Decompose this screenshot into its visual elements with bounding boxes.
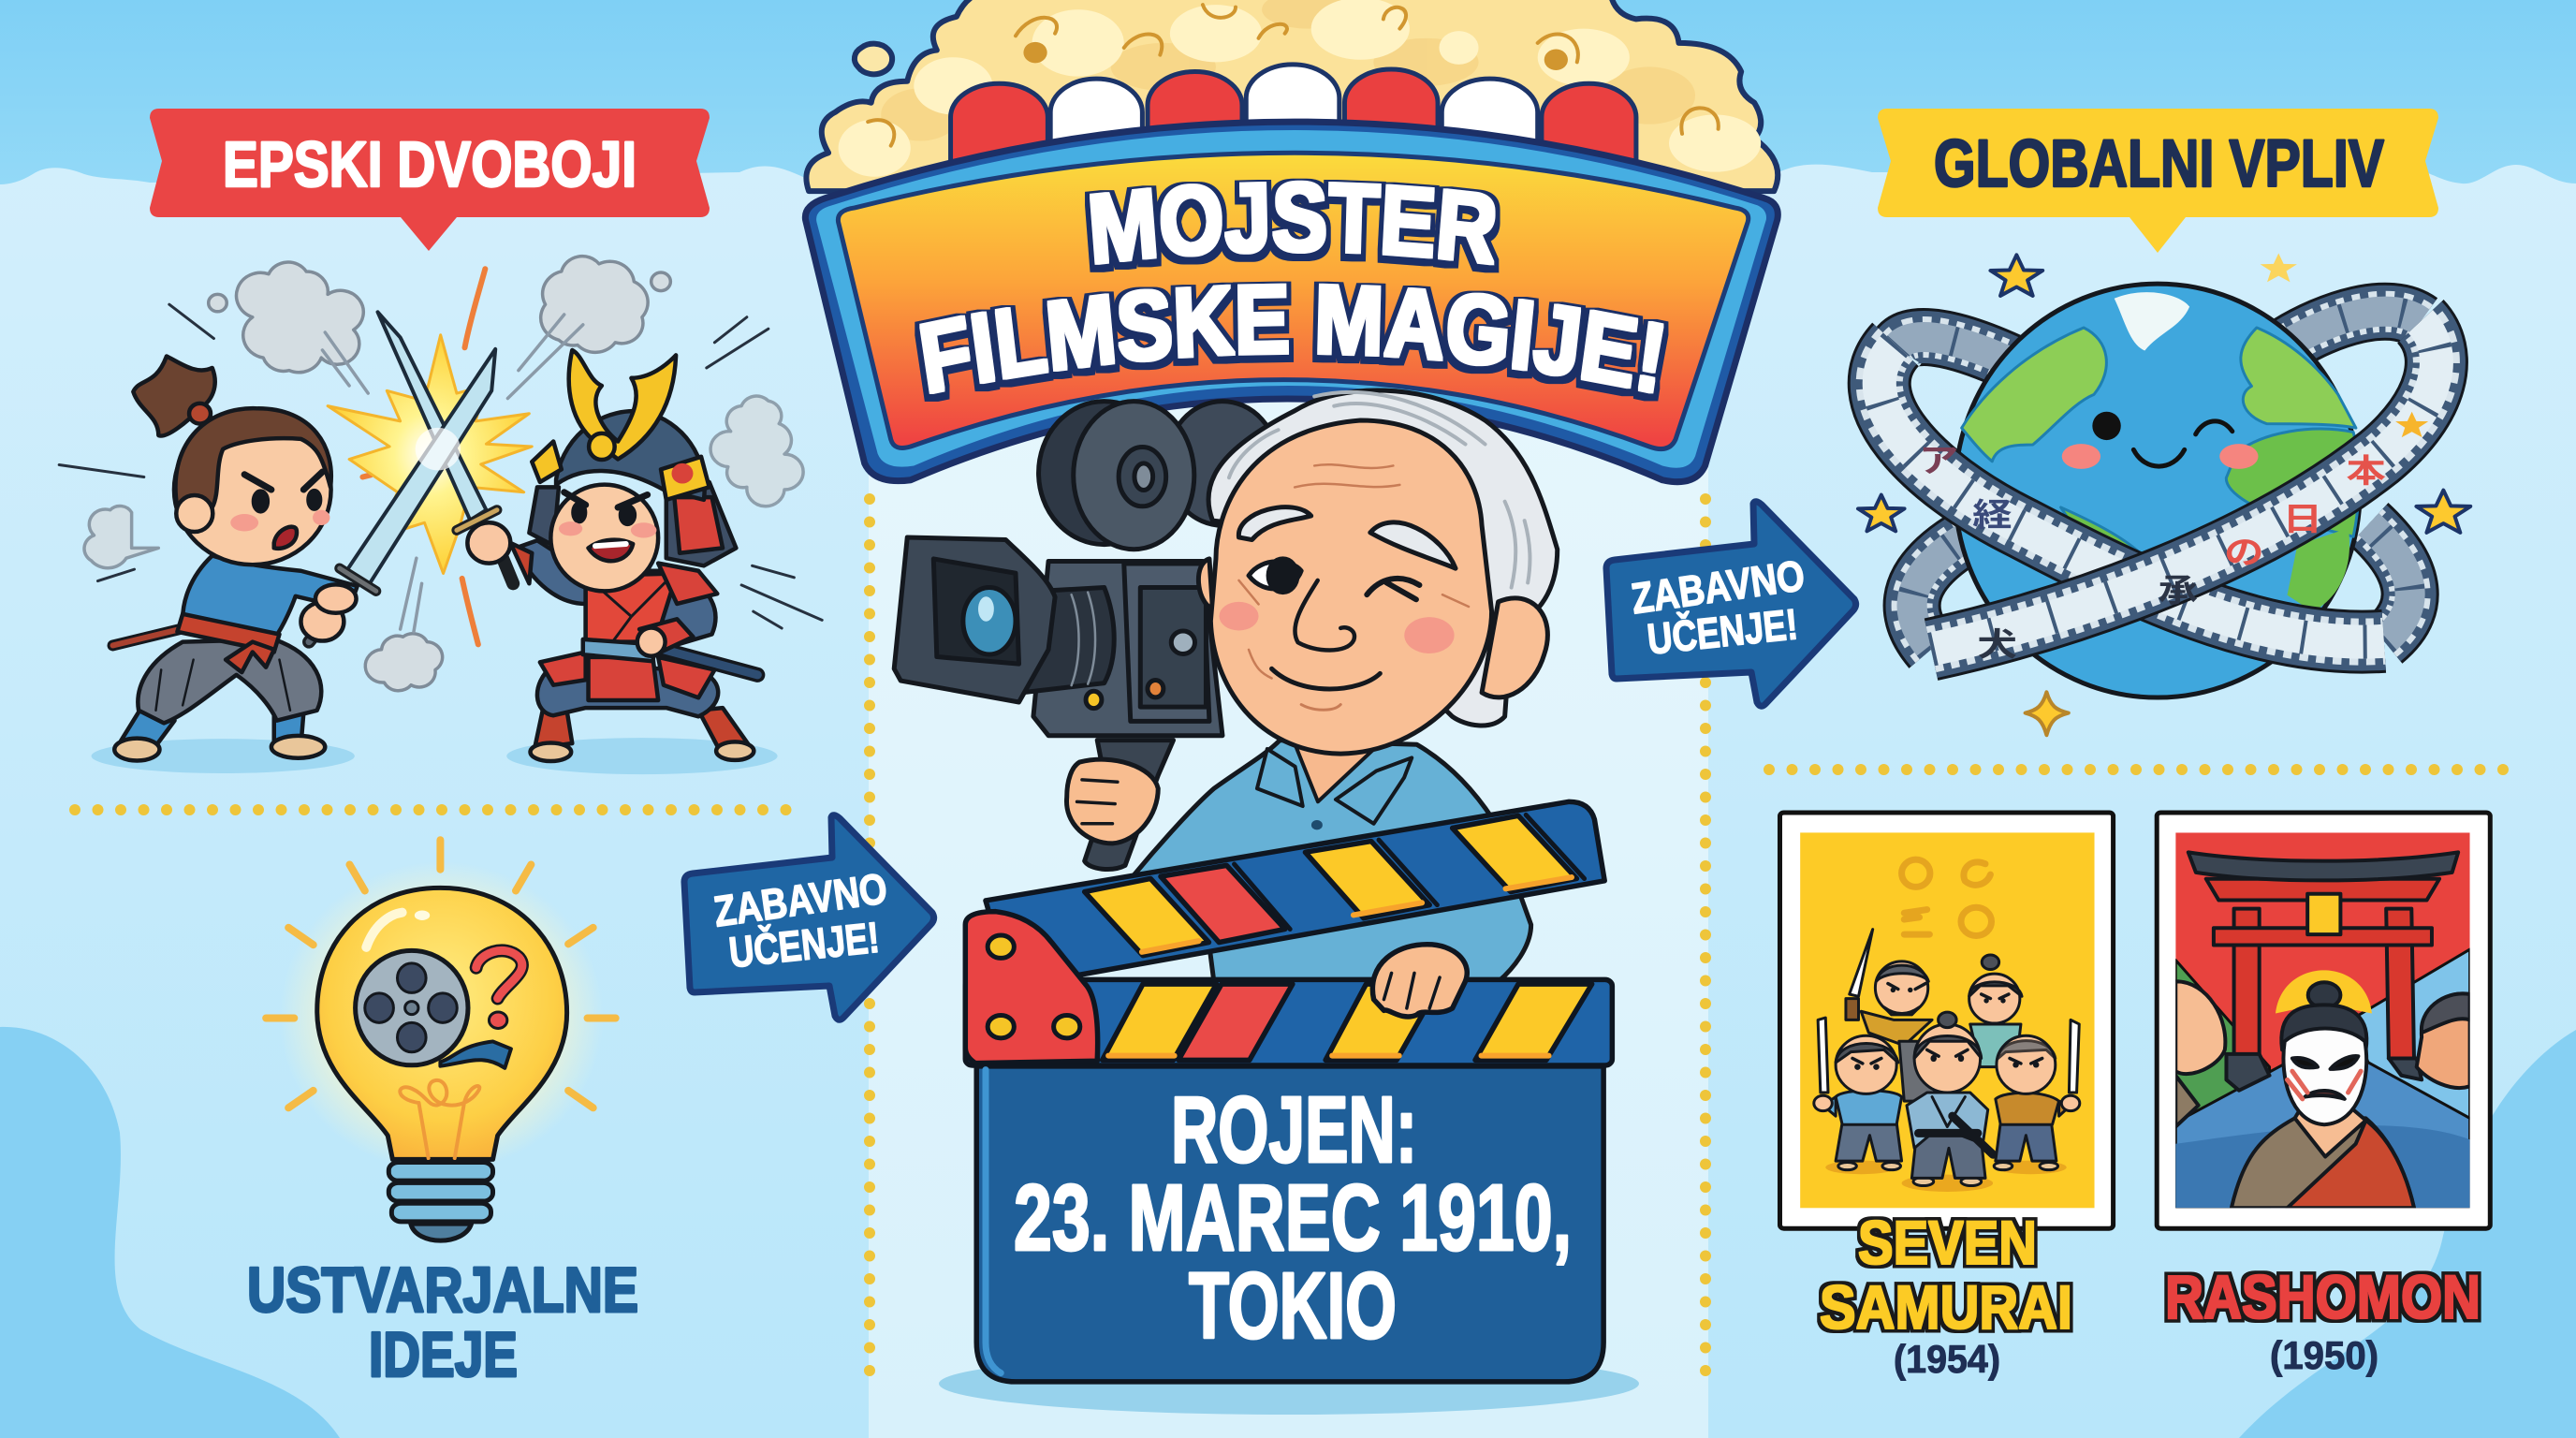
birth date text: 23. MAREC 1910, xyxy=(1014,1166,1572,1270)
birth date text: TOKIO xyxy=(1189,1254,1397,1358)
center: clapper shadow xyxy=(939,1353,1639,1415)
smoke puffs xyxy=(84,257,803,691)
brows xyxy=(1238,507,1311,540)
label: ustvarjalne ideje: USTVARJALNE xyxy=(247,1255,638,1326)
label: seven samurai: SAMURAI xyxy=(1820,1272,2072,1342)
clash burst xyxy=(328,335,532,573)
panel: epic duels xyxy=(59,109,822,774)
label: seven samurai xyxy=(1820,1208,2072,1342)
front film strips xyxy=(1880,321,2437,650)
bulb rays xyxy=(266,840,616,1108)
year 1954: (1954) xyxy=(1894,1337,2000,1381)
witnesses xyxy=(2175,981,2470,1127)
arrow: zabavno ucenje right: ZABAVNO xyxy=(1628,550,1808,623)
swords xyxy=(309,312,513,642)
birth date text xyxy=(1014,1078,1572,1358)
clapperboard xyxy=(965,801,1612,1382)
ear xyxy=(1482,598,1547,697)
face xyxy=(1210,420,1492,754)
center: popcorn xyxy=(806,0,1778,191)
arrow: zabavno ucenje left xyxy=(684,815,934,1020)
character: shirt xyxy=(1133,741,1531,982)
sign frame xyxy=(805,122,1778,482)
arrow: zabavno ucenje right xyxy=(1606,502,1856,706)
mouth xyxy=(1272,668,1380,689)
front left samurai xyxy=(1838,1162,1856,1170)
illustration: globe with film strips xyxy=(1858,254,2470,735)
film strip characters xyxy=(1919,443,2386,663)
film strip characters: 日 xyxy=(2283,502,2322,538)
film strip characters: 経 xyxy=(1972,498,2012,534)
title text: FILMSKE MAGIJE! xyxy=(915,281,1668,402)
label: seven samurai: SEVEN xyxy=(1858,1208,2037,1277)
clapper hinge xyxy=(965,912,1098,1064)
clapper top arm xyxy=(986,801,1604,976)
hand holding camera xyxy=(1066,741,1174,869)
right samurai xyxy=(467,350,757,761)
heading banner: epski dvoboji: EPSKI DVOBOJI xyxy=(223,128,637,200)
birth date text: ROJEN: xyxy=(1171,1078,1417,1182)
film strip characters: 本 xyxy=(2347,454,2386,490)
front centre samurai xyxy=(1913,1177,1934,1186)
eyes xyxy=(1249,562,1301,589)
nose xyxy=(1295,580,1354,651)
film strip characters: 承 xyxy=(2158,573,2198,609)
character: kurosawa head xyxy=(1198,390,1558,754)
label: ustvarjalne ideje xyxy=(247,1255,638,1390)
clapper board body xyxy=(976,1066,1603,1382)
title sign xyxy=(801,118,1781,485)
illustration: samurai duel xyxy=(59,257,822,774)
cheeks xyxy=(1219,602,1259,630)
icon: light bulb with film reel xyxy=(266,840,616,1240)
arrow: zabavno ucenje left: UČENJE! xyxy=(726,913,882,976)
heading banner: epski dvoboji xyxy=(150,109,710,251)
film strip characters: 犬 xyxy=(1978,627,2017,663)
heading banner: globalni vpliv xyxy=(1878,109,2438,253)
arrow: zabavno ucenje left: ZABAVNO xyxy=(710,863,890,936)
back film strips xyxy=(1896,312,2421,650)
motion lines xyxy=(59,304,822,628)
samurai group xyxy=(1814,930,2080,1186)
left samurai xyxy=(113,356,358,760)
poster: rashomon xyxy=(2157,813,2490,1228)
year 1950: (1950) xyxy=(2270,1333,2378,1377)
front right samurai xyxy=(1994,1162,2012,1170)
hand on clapper xyxy=(1372,945,1467,1017)
panel: film posters xyxy=(1779,813,2490,1381)
popcorn box scallops xyxy=(951,65,1636,200)
heading banner: globalni vpliv: GLOBALNI VPLIV xyxy=(1934,127,2384,201)
panel: creative ideas xyxy=(247,840,638,1390)
stars xyxy=(1858,254,2470,735)
poster: seven samurai xyxy=(1779,813,2114,1228)
film strip characters: ア xyxy=(1919,443,1958,479)
title text: MOJSTER xyxy=(1085,178,1500,273)
icon: film camera xyxy=(894,402,1279,736)
label: ustvarjalne ideje: IDEJE xyxy=(369,1319,518,1390)
masked figure xyxy=(2232,982,2414,1208)
arrow: zabavno ucenje right: UČENJE! xyxy=(1645,599,1800,664)
title text xyxy=(915,178,1668,402)
globe xyxy=(1955,284,2360,697)
label: rashomon: RASHOMON xyxy=(2165,1262,2481,1331)
film strip characters: の xyxy=(2224,536,2263,571)
panel: global influence xyxy=(1858,109,2470,735)
hair xyxy=(1208,390,1558,726)
clapper bottom arm xyxy=(965,979,1612,1065)
